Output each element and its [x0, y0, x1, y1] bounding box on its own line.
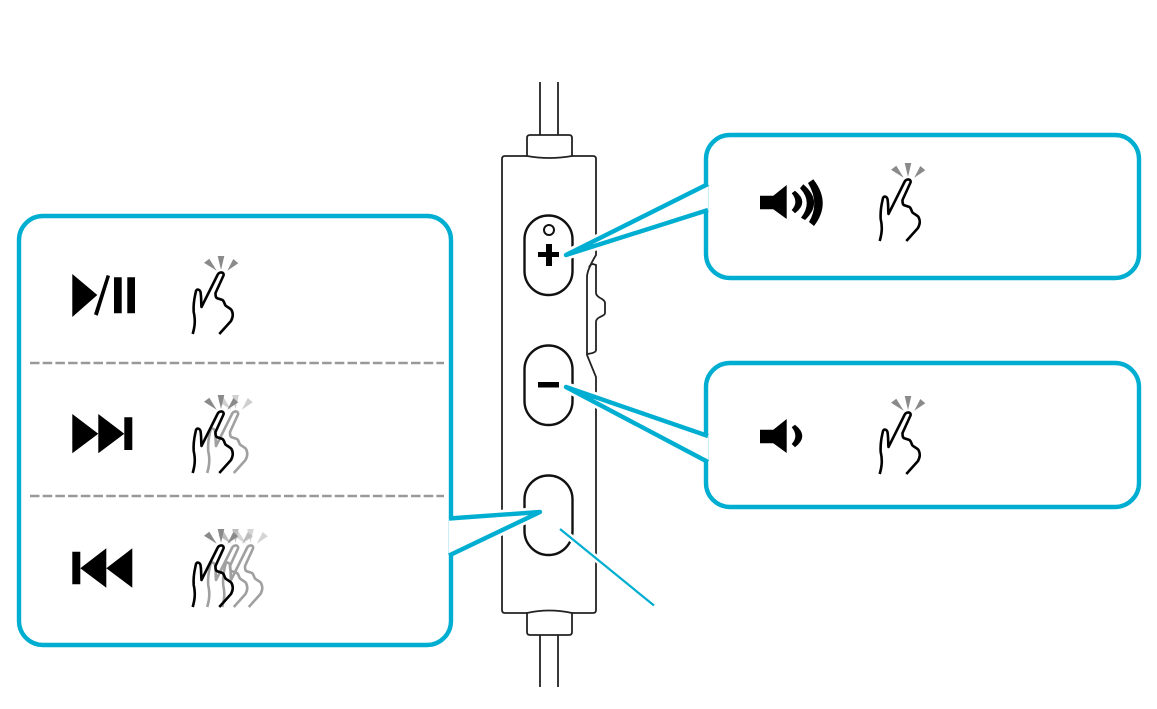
- icon: single tap: [193, 256, 238, 334]
- icon: volume up speaker: [760, 179, 823, 226]
- icon: previous track: [72, 548, 132, 588]
- leader line: [560, 529, 654, 606]
- icon: next track: [72, 414, 132, 453]
- side switch: [587, 264, 605, 354]
- volume down button: [524, 346, 572, 425]
- panel: volume up: [566, 135, 1139, 278]
- panel: volume down: [566, 363, 1139, 507]
- casing outline: [502, 156, 596, 613]
- callout pointer: volume down: [566, 387, 708, 462]
- lower collar: [527, 610, 572, 635]
- icon: triple tap: [193, 529, 268, 607]
- multifunction button: [524, 476, 572, 555]
- icon: single tap: [880, 163, 925, 241]
- panel: playback controls: [19, 216, 540, 645]
- upper cable: [540, 82, 558, 135]
- volume up button: [524, 216, 572, 295]
- icon: play pause: [72, 274, 135, 317]
- remote control body: [502, 82, 605, 687]
- callout pointer: volume up: [566, 184, 708, 255]
- lower cable: [540, 635, 558, 687]
- callout pointer: multifunction button: [449, 512, 540, 556]
- upper collar: [527, 135, 572, 158]
- icon: single tap: [880, 396, 925, 474]
- icon: volume down speaker: [760, 419, 802, 453]
- divider lines: [30, 363, 444, 496]
- icon: double tap: [193, 395, 253, 473]
